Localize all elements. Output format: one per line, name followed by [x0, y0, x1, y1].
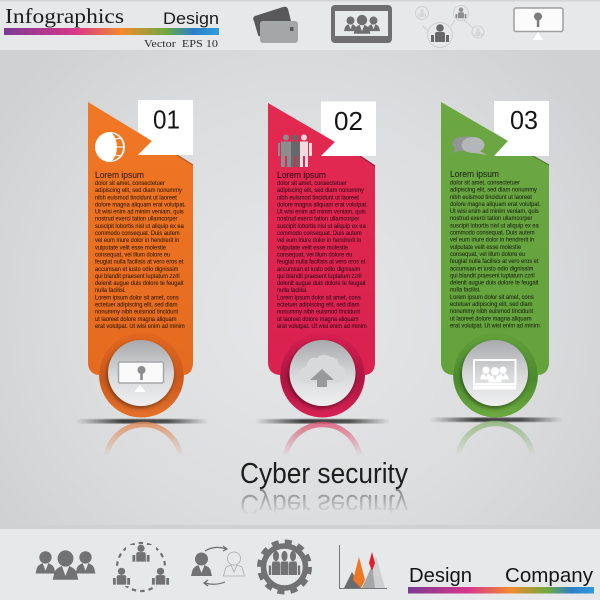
footer brand text: Design — [409, 564, 472, 587]
panel 03 text: consequat, vel illum dolore eu — [450, 251, 526, 258]
panel 02 text: Lorem ipsum dolor sit amet, cons — [277, 294, 361, 302]
panel 02 text: qui blandit praesent luptatum zzril — [277, 273, 362, 280]
panel 01 text — [95, 169, 186, 330]
panel 01 text: ut laoreet dolore magna aliquam — [95, 315, 176, 323]
panel 02 text: nonummy nibh euismod tincidunt — [277, 308, 360, 316]
footer brand text: Company — [505, 564, 594, 587]
panel 02 text: dolore magna aliquam erat volutpat. — [277, 201, 368, 209]
panel 03 text: ectetuer adipiscing elit, sed diam — [450, 301, 532, 308]
panel 01 text: adipiscing elit, sed diam nonummy — [95, 187, 183, 194]
panel 03 text: qui blandit praesent luptatum zzril — [450, 272, 535, 280]
icon: network of people — [416, 6, 484, 48]
header title: Vector EPS 10 — [144, 38, 219, 50]
panel 03 text: nostrud exerci tation ullamcorper — [450, 215, 532, 222]
panel 01 fold edge — [177, 155, 193, 165]
panel 01 text: dolor sit amet, consectetuer — [95, 180, 165, 187]
panel 03 disc with laptop people icon — [462, 340, 528, 406]
panel 01 text: erat volutpat. Ut wisi enim ad minim — [95, 323, 185, 330]
panel 01 text: vulputate velit esse molestie — [95, 244, 167, 252]
panel 03 shape — [441, 102, 549, 418]
panel 01 text: nonummy nibh euismod tincidunt — [95, 308, 178, 316]
panel 02 text: nostrud exerci tation ullamcorper — [277, 215, 359, 223]
panel 01 ring — [100, 333, 184, 417]
panel 01 shape — [88, 102, 193, 418]
icon: team of three — [36, 550, 95, 580]
panel: 01 orange — [88, 100, 193, 418]
panel 01 text: Lorem ipsum dolor sit amet, cons — [95, 294, 179, 302]
header title: Design — [163, 9, 219, 28]
panel 01 text: dolore magna aliquam erat volutpat. — [95, 201, 186, 209]
icon: credit cards — [253, 7, 298, 43]
footer band — [0, 525, 600, 600]
panel 01 text: accumsan et iusto odio dignissim — [95, 265, 178, 273]
panel 02 text: commodo consequat. Duis autem — [277, 230, 362, 237]
panel 01 text: feugiat nulla facilisis at vero eros et — [95, 258, 184, 266]
panel 02 text: erat volutpat. Ut wisi enim ad minim — [277, 323, 367, 330]
header title: Infographics — [5, 4, 124, 28]
panel 01 text: nulla facilisi. — [95, 287, 126, 294]
panel 02 number tag: 02 — [334, 108, 363, 136]
panel 03 number tag — [494, 101, 549, 156]
header title — [4, 4, 219, 50]
icon: speech bubbles — [452, 136, 487, 155]
panel 02 number tag — [321, 102, 376, 156]
panel 02 text: Lorem ipsum — [277, 169, 326, 180]
panel 03 text: dolore magna aliquam erat volutpat. — [450, 201, 541, 208]
panel 01 text: nibh euismod tincidunt ut laoreet — [95, 194, 177, 201]
header band — [0, 0, 600, 50]
panel 02 text: vel eum iriure dolor in hendrerit in — [277, 237, 362, 244]
panel 03 text: Lorem ipsum dolor sit amet, cons — [450, 294, 534, 301]
panel 03 text: commodo consequat. Duis autem — [450, 229, 535, 237]
reflections of the panels — [104, 420, 534, 454]
panel 01 text: nostrud exerci tation ullamcorper — [95, 215, 177, 223]
panel: 03 green — [441, 101, 549, 418]
panel 02 text: nulla facilisi. — [277, 287, 308, 294]
panel 03 text: nulla facilisi. — [450, 286, 481, 294]
panel 02 fold edge — [360, 156, 375, 166]
panel 02 text: accumsan et iusto odio dignissim — [277, 265, 360, 273]
panel 02 text: feugiat nulla facilisis at vero eros et — [277, 258, 366, 266]
panel 01 text: suscipit lobortis nisl ut aliquip ex ea — [95, 223, 184, 230]
panel 01 text: ectetuer adipiscing elit, sed diam — [95, 301, 177, 309]
panel 03 text: delenit augue duis dolore te feugait — [450, 279, 539, 287]
panel 02 disc with cloud upload icon — [290, 340, 356, 406]
panel 02 text — [277, 169, 368, 330]
panel 02 text: ectetuer adipiscing elit, sed diam — [277, 301, 359, 309]
panel 02 text: consequat, vel illum dolore eu — [277, 251, 353, 259]
icon: exchange between people — [191, 546, 244, 586]
panel 01 text: Ut wisi enim ad minim veniam, quis — [95, 208, 184, 216]
panel 02 text: suscipit lobortis nisl ut aliquip ex ea — [277, 223, 366, 230]
panel 03 number tag: 03 — [510, 107, 538, 135]
icon: three standing people — [278, 134, 312, 167]
title: Cyber security: Cyber security — [240, 458, 408, 490]
panel 02 text: delenit augue duis dolore te feugait — [277, 280, 366, 287]
icon: gear with people — [260, 542, 310, 592]
panel 03 text: adipiscing elit, sed diam nonummy — [450, 186, 538, 194]
panel 01 text: consequat, vel illum dolore eu — [95, 251, 171, 259]
panel 03 text: ut laoreet dolore magna aliquam — [450, 315, 531, 323]
icon: keyhole monitor — [514, 8, 563, 40]
title reflection: Cyber security — [240, 488, 408, 520]
panel 03 text — [450, 168, 541, 330]
panel 03 text: vel eum iriure dolor in hendrerit in — [450, 236, 535, 244]
panel 03 text: Ut wisi enim ad minim veniam, quis — [450, 208, 539, 215]
panel 03 text: Lorem ipsum — [450, 168, 499, 179]
panel 01 text: delenit augue duis dolore te feugait — [95, 280, 184, 287]
panel 03 text: nibh euismod tincidunt ut laoreet — [450, 193, 532, 201]
panel 03 text: vulputate velit esse molestie — [450, 243, 522, 251]
panel 03 fold edge — [533, 156, 549, 165]
panel 02 text: dolor sit amet, consectetuer — [277, 180, 347, 187]
footer brand text — [408, 564, 594, 594]
panel 03 ring — [454, 333, 538, 417]
panel 01 text: qui blandit praesent luptatum zzril — [95, 273, 180, 280]
panel 02 text: adipiscing elit, sed diam nonummy — [277, 187, 365, 194]
panel 02 shape — [268, 103, 375, 418]
panel 02 text: Ut wisi enim ad minim veniam, quis — [277, 208, 366, 216]
panel 03 text: erat volutpat. Ut wisi enim ad minim — [450, 322, 540, 330]
panel 03 text: nonummy nibh euismod tincidunt — [450, 308, 533, 315]
panel 03 text: feugiat nulla facilisis at vero eros et — [450, 258, 539, 265]
icon: people on laptop — [331, 5, 392, 43]
panel 01 disc with keyhole icon — [108, 340, 174, 406]
panel 01 text: Lorem ipsum — [95, 169, 144, 180]
panel 02 text: vulputate velit esse molestie — [277, 244, 349, 252]
panel 03 text: accumsan et iusto odio dignissim — [450, 265, 533, 272]
panel 03 text: suscipit lobortis nisl ut aliquip ex ea — [450, 222, 539, 230]
panel 02 text: nibh euismod tincidunt ut laoreet — [277, 194, 359, 201]
icon: circle of people — [111, 543, 171, 591]
panel 01 number tag: 01 — [153, 106, 180, 134]
floor shadows — [76, 418, 562, 424]
panel: 02 red — [268, 102, 376, 418]
panel 01 text: vel eum iriure dolor in hendrerit in — [95, 237, 180, 244]
panel 01 number tag — [138, 100, 193, 155]
panel 03 text: dolor sit amet, consectetuer — [450, 179, 520, 187]
panel 02 text: ut laoreet dolore magna aliquam — [277, 315, 358, 323]
chart: mountain area chart — [340, 545, 387, 588]
panel 02 ring — [280, 333, 364, 417]
icon: globe — [95, 132, 125, 162]
panel 01 text: commodo consequat. Duis autem — [95, 230, 180, 237]
